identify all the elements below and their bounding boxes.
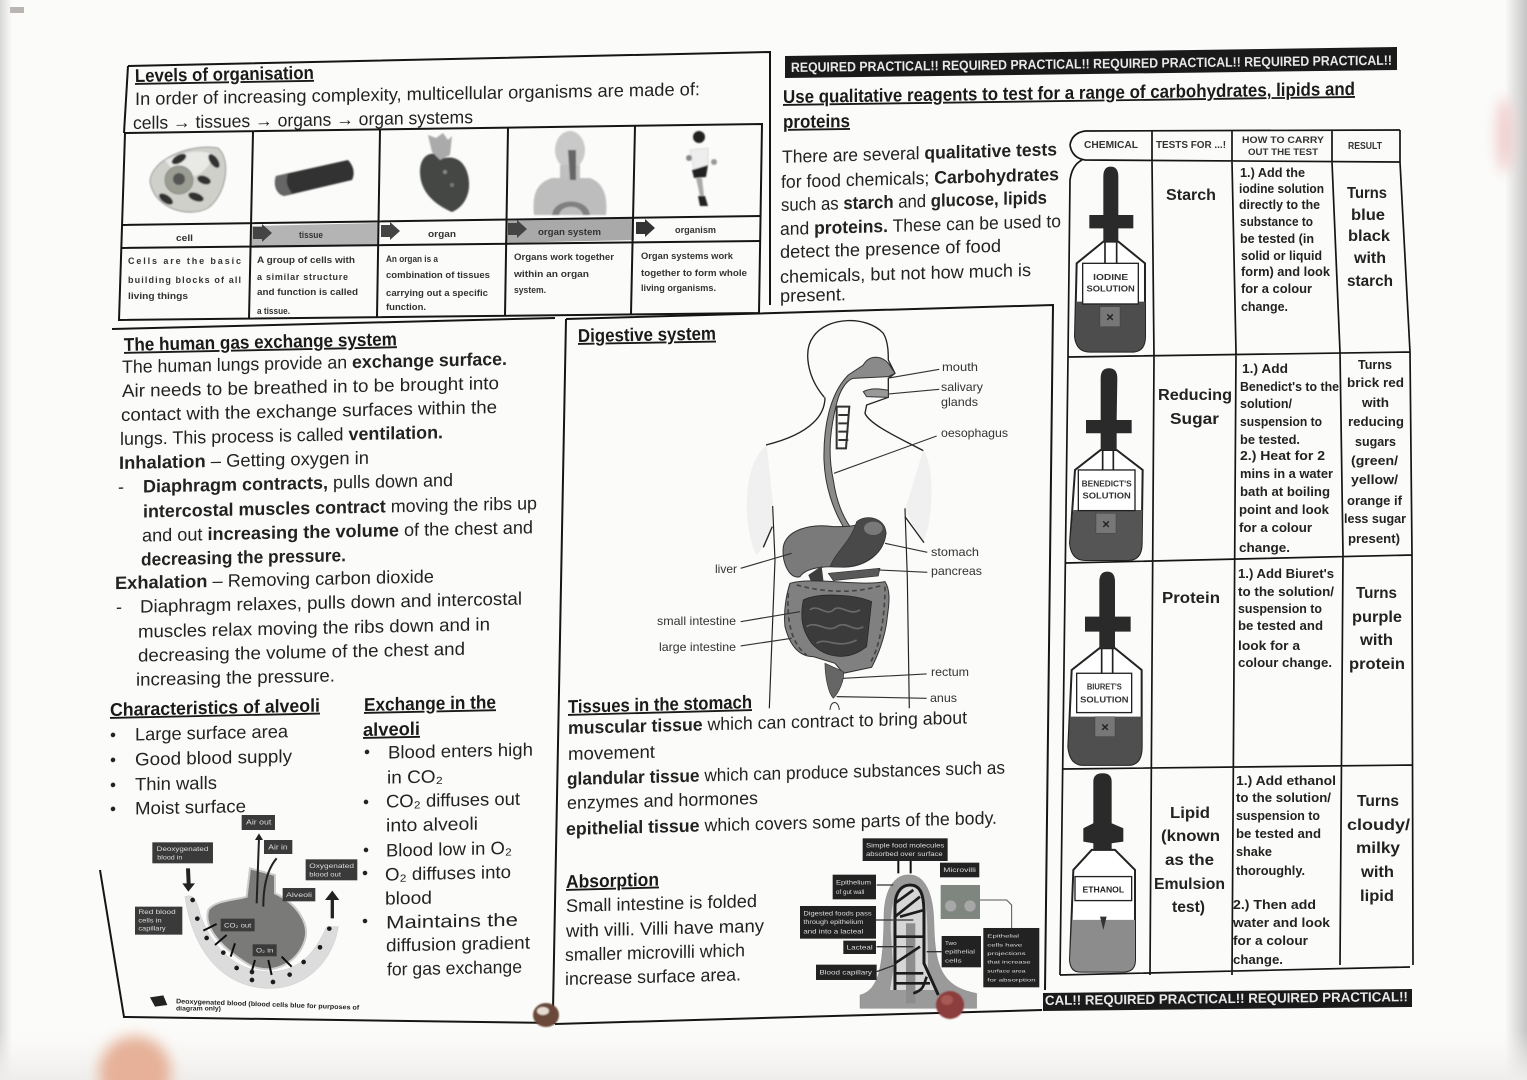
organ labels: mouth bbox=[942, 360, 978, 374]
column: result: Turns bbox=[1357, 793, 1399, 810]
villus callout labels: projections bbox=[987, 951, 1026, 957]
column: how to carry out the test bbox=[1232, 166, 1339, 967]
villus callout labels bbox=[800, 838, 1039, 987]
table labels: organ bbox=[428, 229, 456, 239]
column: result: sugars bbox=[1355, 435, 1396, 449]
text block: exchange in the alveoli: alveoli bbox=[363, 718, 420, 740]
villus callout labels: Two bbox=[945, 941, 957, 947]
text block: exchange in the alveoli: for gas exchange bbox=[387, 957, 522, 980]
villus callout labels: through epithelium bbox=[803, 920, 863, 926]
text block: qualitative tests intro: and proteins. These can be used to bbox=[780, 211, 1061, 239]
callout labels: Deoxygenated bbox=[157, 846, 209, 853]
callout labels: blood out bbox=[309, 872, 341, 879]
text block: absorption: increase surface area. bbox=[565, 964, 741, 989]
column: how to carry out the test: mins in a water bbox=[1240, 467, 1333, 481]
column: how to carry out the test: iodine solution bbox=[1239, 182, 1324, 196]
text block: ventilation bbox=[115, 348, 537, 690]
column: how to carry out the test: point and look bbox=[1239, 503, 1329, 517]
column: how to carry out the test: solid or liquid bbox=[1241, 249, 1322, 263]
column: how to carry out the test: for a colour bbox=[1239, 521, 1312, 535]
column: how to carry out the test: thoroughly. bbox=[1236, 864, 1305, 878]
text block: ventilation: - bbox=[116, 597, 122, 617]
organ labels bbox=[657, 360, 1008, 705]
text block: ventilation: The human lungs provide an exchange surface. bbox=[122, 349, 507, 377]
callout labels: blood in bbox=[157, 854, 183, 861]
text block: exchange in the alveoli: Exchange in the bbox=[364, 691, 496, 715]
column: tests for: Reducing bbox=[1158, 387, 1232, 404]
column: how to carry out the test: 2.) Heat for 2 bbox=[1240, 449, 1325, 463]
text block: tissues in the stomach: muscular tissue which can contract to bring about bbox=[568, 708, 967, 738]
column: how to carry out the test: 1.) Add bbox=[1242, 362, 1288, 376]
text block: ventilation: increasing the pressure. bbox=[136, 665, 335, 690]
column: result: orange if bbox=[1347, 494, 1403, 508]
column: how to carry out the test: substance to bbox=[1240, 215, 1313, 229]
text block: tissues in the stomach: movement bbox=[568, 742, 655, 764]
column: result: purple bbox=[1352, 609, 1402, 626]
text block: ventilation: lungs. This process is called ventilation. bbox=[120, 422, 443, 449]
text block: tissues in the stomach: glandular tissue which can produce substances such as bbox=[567, 758, 1005, 789]
heading: human gas exchange system: The human gas exchange system bbox=[124, 328, 397, 355]
table labels: organ system bbox=[538, 227, 601, 237]
villus callout labels: surface area bbox=[987, 969, 1026, 975]
icon: biuret's bottle bbox=[1068, 572, 1142, 765]
text block: ventilation: Exhalation – Removing carbon dioxide bbox=[115, 566, 434, 593]
villus callout labels: that increase bbox=[987, 960, 1031, 966]
column: result: black bbox=[1348, 228, 1390, 245]
text block: ventilation: contact with the exchange surfaces within the bbox=[121, 397, 497, 425]
icon: heart bbox=[420, 133, 469, 212]
column: result: Turns bbox=[1347, 185, 1387, 202]
banner: required practical top: REQUIRED PRACTICAL!! REQUIRED PRACTICAL!! REQUIRED PRACTICAL!! REQUIRED PRACTICAL!! bbox=[791, 53, 1392, 75]
column: how to carry out the test: Benedict's to the bbox=[1240, 380, 1339, 394]
icon: benedict's bottle: × bbox=[1102, 516, 1110, 531]
table descriptions: together to form whole bbox=[641, 268, 747, 278]
legend text: Deoxygenated blood (blood cells blue for purposes of bbox=[176, 998, 360, 1012]
panel: digestive system bbox=[553, 305, 1053, 1024]
table labels: tissue bbox=[299, 230, 323, 240]
icon: biuret's bottle: × bbox=[1101, 720, 1109, 735]
diagram: villus bbox=[800, 838, 1039, 1008]
column: how to carry out the test: bath at boiling bbox=[1240, 485, 1330, 499]
legend swatch bbox=[150, 995, 167, 1007]
column: result: blue bbox=[1351, 207, 1385, 224]
villus callout labels: Lacteal bbox=[847, 946, 873, 952]
text block: exchange in the alveoli: O₂ diffuses into bbox=[385, 862, 511, 885]
callout labels: Alveoli bbox=[286, 892, 313, 899]
organ labels: oesophagus bbox=[941, 426, 1008, 440]
column: result bbox=[1344, 185, 1411, 905]
icon: cell bbox=[150, 147, 226, 212]
column: how to carry out the test: be tested (in bbox=[1240, 232, 1314, 246]
column: result: reducing bbox=[1348, 415, 1404, 429]
table descriptions: within an organ bbox=[513, 269, 589, 279]
heading: qualitative reagents bbox=[783, 78, 1355, 132]
column: result: lipid bbox=[1360, 888, 1394, 905]
table descriptions: living things bbox=[128, 291, 188, 301]
villus callout labels: Microvilli bbox=[943, 868, 976, 874]
callout labels bbox=[135, 815, 357, 956]
organ labels: salivary bbox=[941, 380, 983, 394]
text block: ventilation: muscles relax moving the ribs down and in bbox=[138, 614, 490, 642]
icon: iodine bottle: × bbox=[1106, 310, 1114, 325]
panel: food tests table bbox=[1060, 130, 1413, 975]
text block: characteristics of alveoli: Thin walls bbox=[135, 773, 217, 794]
table descriptions: An organ is a bbox=[386, 254, 439, 264]
column: result: (green/ bbox=[1351, 454, 1399, 468]
icon: benedict's bottle: SOLUTION bbox=[1082, 490, 1131, 500]
column: how to carry out the test: directly to the bbox=[1239, 198, 1320, 212]
column: how to carry out the test: look for a bbox=[1238, 639, 1301, 653]
column: tests for: Lipid bbox=[1170, 805, 1210, 822]
callout labels: O₂ in bbox=[256, 948, 274, 955]
text block: tissues in the stomach: enzymes and hormones bbox=[567, 788, 758, 813]
text block: absorption: Absorption bbox=[566, 869, 659, 892]
text block: characteristics of alveoli bbox=[110, 695, 320, 819]
text block: exchange in the alveoli: Blood low in O₂ bbox=[386, 838, 512, 861]
villus callout labels: Epithelium bbox=[836, 880, 871, 886]
text block: ventilation: Diaphragm relaxes, pulls down and intercostal bbox=[140, 589, 522, 617]
column: result: protein bbox=[1349, 656, 1405, 673]
table descriptions: Organ systems work bbox=[641, 251, 734, 261]
icon: iodine bottle: IODINE bbox=[1093, 272, 1128, 282]
text block: ventilation: decreasing the pressure. bbox=[141, 545, 346, 570]
icon: biuret's bottle: SOLUTION bbox=[1080, 695, 1128, 705]
text block: absorption: smaller microvilli which bbox=[565, 940, 745, 965]
villus callout labels: absorbed over surface bbox=[866, 852, 944, 858]
table header: CHEMICAL bbox=[1084, 139, 1139, 151]
table descriptions: carrying out a specific bbox=[386, 288, 488, 298]
villus callout labels: for absorption bbox=[987, 978, 1036, 984]
text block: ventilation: intercostal muscles contract moving the ribs up bbox=[143, 493, 537, 522]
column: tests for: Protein bbox=[1162, 590, 1220, 607]
panel: human gas exchange system bbox=[100, 318, 555, 1023]
callout labels: cells in bbox=[138, 918, 162, 924]
callout labels: Red blood bbox=[138, 910, 176, 916]
icon: ethanol bottle: ETHANOL bbox=[1082, 885, 1125, 895]
icon: biuret's bottle: BIURET'S bbox=[1087, 682, 1122, 691]
panel: levels of organisation bbox=[119, 52, 770, 320]
text block: exchange in the alveoli: in CO₂ bbox=[387, 766, 443, 788]
column: result: present) bbox=[1348, 532, 1400, 546]
table header: RESULT bbox=[1348, 141, 1382, 152]
text block: characteristics of alveoli: Good blood supply bbox=[135, 746, 292, 769]
table header: TESTS FOR ...! bbox=[1156, 139, 1226, 151]
table grid bbox=[1060, 130, 1413, 975]
icon: benedict's bottle bbox=[1070, 368, 1143, 560]
table descriptions: a tissue. bbox=[257, 306, 290, 316]
heading: levels of organisation: Levels of organisation bbox=[135, 62, 314, 86]
icon: organ system torso bbox=[534, 131, 606, 215]
table descriptions: living organisms. bbox=[641, 283, 716, 293]
text block: qualitative tests intro bbox=[780, 139, 1061, 306]
table header: OUT THE TEST bbox=[1248, 147, 1318, 158]
banner: required practical top bbox=[785, 47, 1397, 78]
column: how to carry out the test: 1.) Add ethanol bbox=[1236, 774, 1336, 788]
table descriptions: function. bbox=[386, 302, 426, 312]
column: how to carry out the test: be tested and bbox=[1236, 827, 1321, 841]
table header: HOW TO CARRY bbox=[1242, 135, 1325, 146]
column: how to carry out the test: solution/ bbox=[1240, 397, 1293, 411]
villus callout labels: cells bbox=[945, 958, 962, 964]
text block: characteristics of alveoli: Moist surface bbox=[135, 796, 246, 818]
villus callout labels: of gut wall bbox=[836, 890, 864, 896]
organ labels: anus bbox=[930, 691, 957, 705]
icon: iodine bottle bbox=[1075, 167, 1145, 352]
organ labels: liver bbox=[715, 562, 737, 576]
text block: ventilation: and out increasing the volume of the chest and bbox=[142, 517, 533, 546]
callout labels: Air in bbox=[268, 842, 288, 851]
icon: iodine bottle: SOLUTION bbox=[1086, 284, 1135, 294]
column: result: cloudy/ bbox=[1347, 817, 1411, 834]
icon: running person bbox=[686, 131, 717, 206]
column: result: with bbox=[1353, 250, 1386, 267]
table labels: cell bbox=[176, 233, 193, 243]
text block: qualitative tests intro: chemicals, but not how much is bbox=[780, 260, 1031, 287]
column: how to carry out the test: 2.) Then add bbox=[1233, 898, 1316, 912]
table labels bbox=[176, 219, 716, 243]
text block: tissues in the stomach: Tissues in the stomach bbox=[568, 691, 752, 717]
column: result: yellow/ bbox=[1351, 473, 1399, 487]
text block: exchange in the alveoli: Blood enters high bbox=[388, 739, 533, 763]
table descriptions: system. bbox=[514, 285, 546, 295]
text block: absorption bbox=[565, 866, 764, 989]
callout labels: Air out bbox=[246, 817, 271, 826]
text block: absorption: Small intestine is folded bbox=[566, 891, 757, 916]
column: result: starch bbox=[1347, 273, 1393, 290]
column: tests for: as the bbox=[1165, 852, 1214, 869]
column: how to carry out the test: water and look bbox=[1232, 916, 1330, 930]
table descriptions: a similar structure bbox=[257, 272, 348, 282]
villus callout labels: Epithelial bbox=[987, 933, 1019, 939]
text block: tissues in the stomach bbox=[566, 685, 1005, 839]
text block: exchange in the alveoli bbox=[363, 690, 533, 980]
text block: absorption: with villi. Villi have many bbox=[565, 916, 764, 941]
table descriptions: Cells are the basic bbox=[128, 256, 241, 266]
organ labels: pancreas bbox=[931, 564, 982, 578]
table header bbox=[1084, 135, 1382, 158]
column: tests for: Sugar bbox=[1170, 411, 1219, 428]
column: how to carry out the test: change. bbox=[1233, 953, 1283, 967]
organ labels: rectum bbox=[931, 665, 969, 679]
text block: exchange in the alveoli: Maintains the bbox=[386, 910, 518, 933]
column: how to carry out the test: be tested. bbox=[1240, 433, 1300, 447]
table descriptions: combination of tissues bbox=[386, 270, 490, 280]
text block: exchange in the alveoli: blood bbox=[385, 888, 432, 909]
organ label leaders bbox=[741, 369, 939, 698]
villus callout labels: and into a lacteal bbox=[803, 929, 863, 935]
text block: exchange in the alveoli: into alveoli bbox=[386, 814, 478, 836]
table descriptions: building blocks of all bbox=[128, 275, 241, 285]
column: how to carry out the test: be tested and bbox=[1238, 619, 1323, 633]
column: result: Turns bbox=[1358, 358, 1392, 372]
text block: tissues in the stomach: epithelial tissue which covers some parts of the body. bbox=[566, 808, 997, 839]
table descriptions: A group of cells with bbox=[257, 255, 355, 265]
intro text: increasing complexity bbox=[133, 79, 700, 133]
heading: digestive system: Digestive system bbox=[578, 323, 716, 346]
table descriptions: Organs work together bbox=[514, 252, 615, 262]
text block: characteristics of alveoli: Large surface area bbox=[135, 721, 289, 744]
text block: qualitative tests intro: detect the presence of food bbox=[780, 236, 1001, 262]
intro text: increasing complexity: cells → tissues → organs → organ systems bbox=[133, 107, 473, 133]
organ labels: small intestine bbox=[657, 614, 736, 628]
text block: qualitative tests intro: such as starch and glucose, lipids bbox=[781, 188, 1047, 215]
column: result: with bbox=[1360, 864, 1394, 881]
intro text: increasing complexity: In order of increasing complexity, multicellular organisms are made of: bbox=[135, 79, 700, 109]
text block: exchange in the alveoli: diffusion gradient bbox=[386, 933, 530, 956]
diagram: alveolus gas exchange bbox=[135, 815, 360, 1013]
column: result: with bbox=[1361, 396, 1389, 410]
column: how to carry out the test: suspension to bbox=[1240, 415, 1322, 429]
column: tests for: Emulsion bbox=[1154, 876, 1225, 893]
column: how to carry out the test: colour change. bbox=[1238, 656, 1332, 670]
column: tests for: Starch bbox=[1166, 187, 1216, 204]
text block: ventilation: Inhalation – Getting oxygen in bbox=[119, 448, 369, 473]
icon: muscle tissue bbox=[275, 160, 354, 196]
text block: qualitative tests intro: There are several qualitative tests bbox=[782, 139, 1057, 167]
icon: benedict's bottle: BENEDICT'S bbox=[1082, 480, 1132, 489]
text block: exchange in the alveoli: CO₂ diffuses out bbox=[386, 789, 520, 812]
column: how to carry out the test: form) and look bbox=[1241, 265, 1330, 279]
magnet: brown bbox=[533, 1003, 559, 1027]
villus callout labels: epithelial bbox=[945, 949, 975, 955]
text block: characteristics of alveoli: Characteristics of alveoli bbox=[110, 695, 320, 720]
column: how to carry out the test: shake bbox=[1236, 845, 1272, 859]
column: tests for bbox=[1154, 187, 1232, 916]
text block: ventilation: Air needs to be breathed in to be brought into bbox=[122, 373, 499, 401]
diagram: human digestive tract bbox=[741, 321, 939, 710]
column: how to carry out the test: change. bbox=[1241, 300, 1288, 314]
legend text: diagram only) bbox=[176, 1006, 221, 1013]
text block: ventilation: - bbox=[118, 477, 124, 497]
icon: ethanol bottle bbox=[1070, 773, 1135, 972]
column: how to carry out the test: for a colour bbox=[1241, 282, 1312, 296]
column: how to carry out the test: for a colour bbox=[1233, 934, 1308, 948]
column: how to carry out the test: to the solution/ bbox=[1236, 791, 1332, 805]
villus callout labels: cells have bbox=[987, 942, 1023, 948]
magnet: red bbox=[936, 991, 964, 1019]
villus callout labels: Digested foods pass bbox=[803, 911, 872, 917]
column: result: less sugar bbox=[1344, 512, 1406, 526]
table descriptions: and function is called bbox=[257, 287, 358, 297]
column: result: milky bbox=[1356, 840, 1400, 857]
text block: qualitative tests intro: for food chemicals; Carbohydrates bbox=[781, 164, 1059, 192]
column: how to carry out the test: suspension to bbox=[1238, 602, 1322, 616]
organ labels: glands bbox=[941, 395, 978, 409]
heading: qualitative reagents: proteins bbox=[783, 110, 850, 132]
callout labels: CO₂ out bbox=[224, 922, 251, 929]
column: how to carry out the test: 1.) Add the bbox=[1240, 166, 1305, 180]
organ labels: stomach bbox=[931, 545, 979, 559]
table descriptions bbox=[128, 251, 747, 316]
column: tests for: (known bbox=[1161, 828, 1220, 845]
table: organisation levels bbox=[119, 124, 762, 320]
table labels: organism bbox=[675, 225, 716, 235]
column: result: Turns bbox=[1356, 585, 1397, 602]
column: how to carry out the test: change. bbox=[1239, 541, 1290, 555]
organ labels: large intestine bbox=[659, 640, 736, 654]
column: how to carry out the test: suspension to bbox=[1236, 809, 1320, 823]
column: how to carry out the test: to the solution/ bbox=[1238, 585, 1335, 599]
column: result: brick red bbox=[1347, 376, 1404, 390]
heading: qualitative reagents: Use qualitative reagents to test for a range of carbohydrates, lipids and bbox=[783, 78, 1355, 107]
callout labels: Oxygenated bbox=[309, 863, 354, 870]
villus callout labels: Blood capillary bbox=[819, 970, 872, 976]
callout labels: capillary bbox=[138, 927, 166, 933]
column: how to carry out the test: 1.) Add Biuret's bbox=[1238, 567, 1334, 581]
text block: qualitative tests intro: present. bbox=[780, 284, 846, 306]
column: result: with bbox=[1359, 632, 1393, 649]
villus callout labels: Simple food molecules bbox=[866, 843, 944, 849]
banner: required practical bottom: CAL!! REQUIRED PRACTICAL!! REQUIRED PRACTICAL!! bbox=[1045, 989, 1408, 1008]
text block: ventilation: decreasing the volume of the chest and bbox=[138, 639, 465, 666]
column: tests for: test) bbox=[1172, 899, 1205, 916]
text block: ventilation: Diaphragm contracts, pulls down and bbox=[143, 470, 453, 497]
